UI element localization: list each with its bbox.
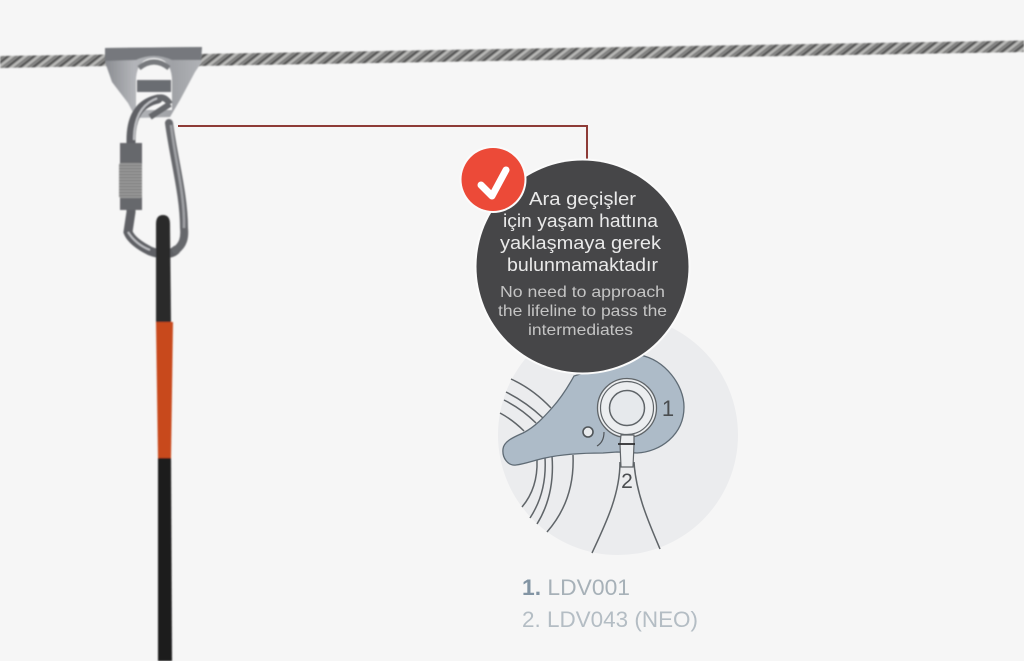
- turkish heading: bulunmamaktadır: [507, 254, 658, 275]
- carabiner left spine and base: [128, 99, 176, 254]
- rope of connector 2: [592, 462, 660, 553]
- photo: intermediate anchor and carabiner: [105, 47, 202, 661]
- ring of plate: [598, 378, 656, 438]
- legend: [522, 575, 698, 632]
- number 1: 1: [662, 396, 674, 421]
- bracket inner wire: [139, 62, 169, 68]
- english subtext: the lifeline to pass the: [498, 303, 667, 320]
- legend item 1: 1. LDV001: [522, 575, 630, 600]
- diagram: connector detail: [498, 315, 738, 555]
- carabiner highlight: [128, 98, 158, 250]
- black clip line: [618, 443, 635, 445]
- legend item 2: 2. LDV043 (NEO): [522, 607, 698, 632]
- lower concentric arcs: [522, 455, 573, 532]
- english subtext: No need to approach: [500, 284, 665, 301]
- number 2: 2: [621, 470, 633, 493]
- carabiner right spine: [169, 123, 184, 250]
- orange rope section: [156, 322, 173, 459]
- anchor bracket: [105, 47, 202, 118]
- icon: red check badge: [460, 146, 526, 213]
- curved top of carabiner in the hole: [150, 97, 170, 117]
- turkish heading: için yaşam hattına: [503, 210, 659, 231]
- connector neck: [620, 435, 634, 467]
- screw-lock gate: [120, 143, 142, 210]
- threaded sleeve: [119, 163, 142, 198]
- black rope lower section: [158, 458, 172, 661]
- turkish heading: [500, 188, 662, 275]
- connector line to callout: [178, 126, 587, 162]
- carabiner right spine highlight: [171, 125, 184, 228]
- bracket inner bar: [137, 80, 171, 92]
- english subtext: intermediates: [528, 322, 633, 339]
- anchor plate 1: [503, 355, 684, 465]
- small curve on plate: [597, 432, 604, 446]
- turkish heading: Ara geçişler: [529, 188, 636, 209]
- light background disc: [498, 315, 738, 555]
- upper concentric arcs: [500, 379, 551, 431]
- callout: dark circle: [474, 158, 690, 374]
- small hole in plate: [583, 427, 593, 437]
- steel cable lifeline: [0, 40, 1024, 68]
- bracket top plate: [105, 47, 202, 61]
- black rope upper section: [156, 215, 171, 323]
- english subtext: [498, 284, 667, 339]
- turkish heading: yaklaşmaya gerek: [500, 232, 662, 253]
